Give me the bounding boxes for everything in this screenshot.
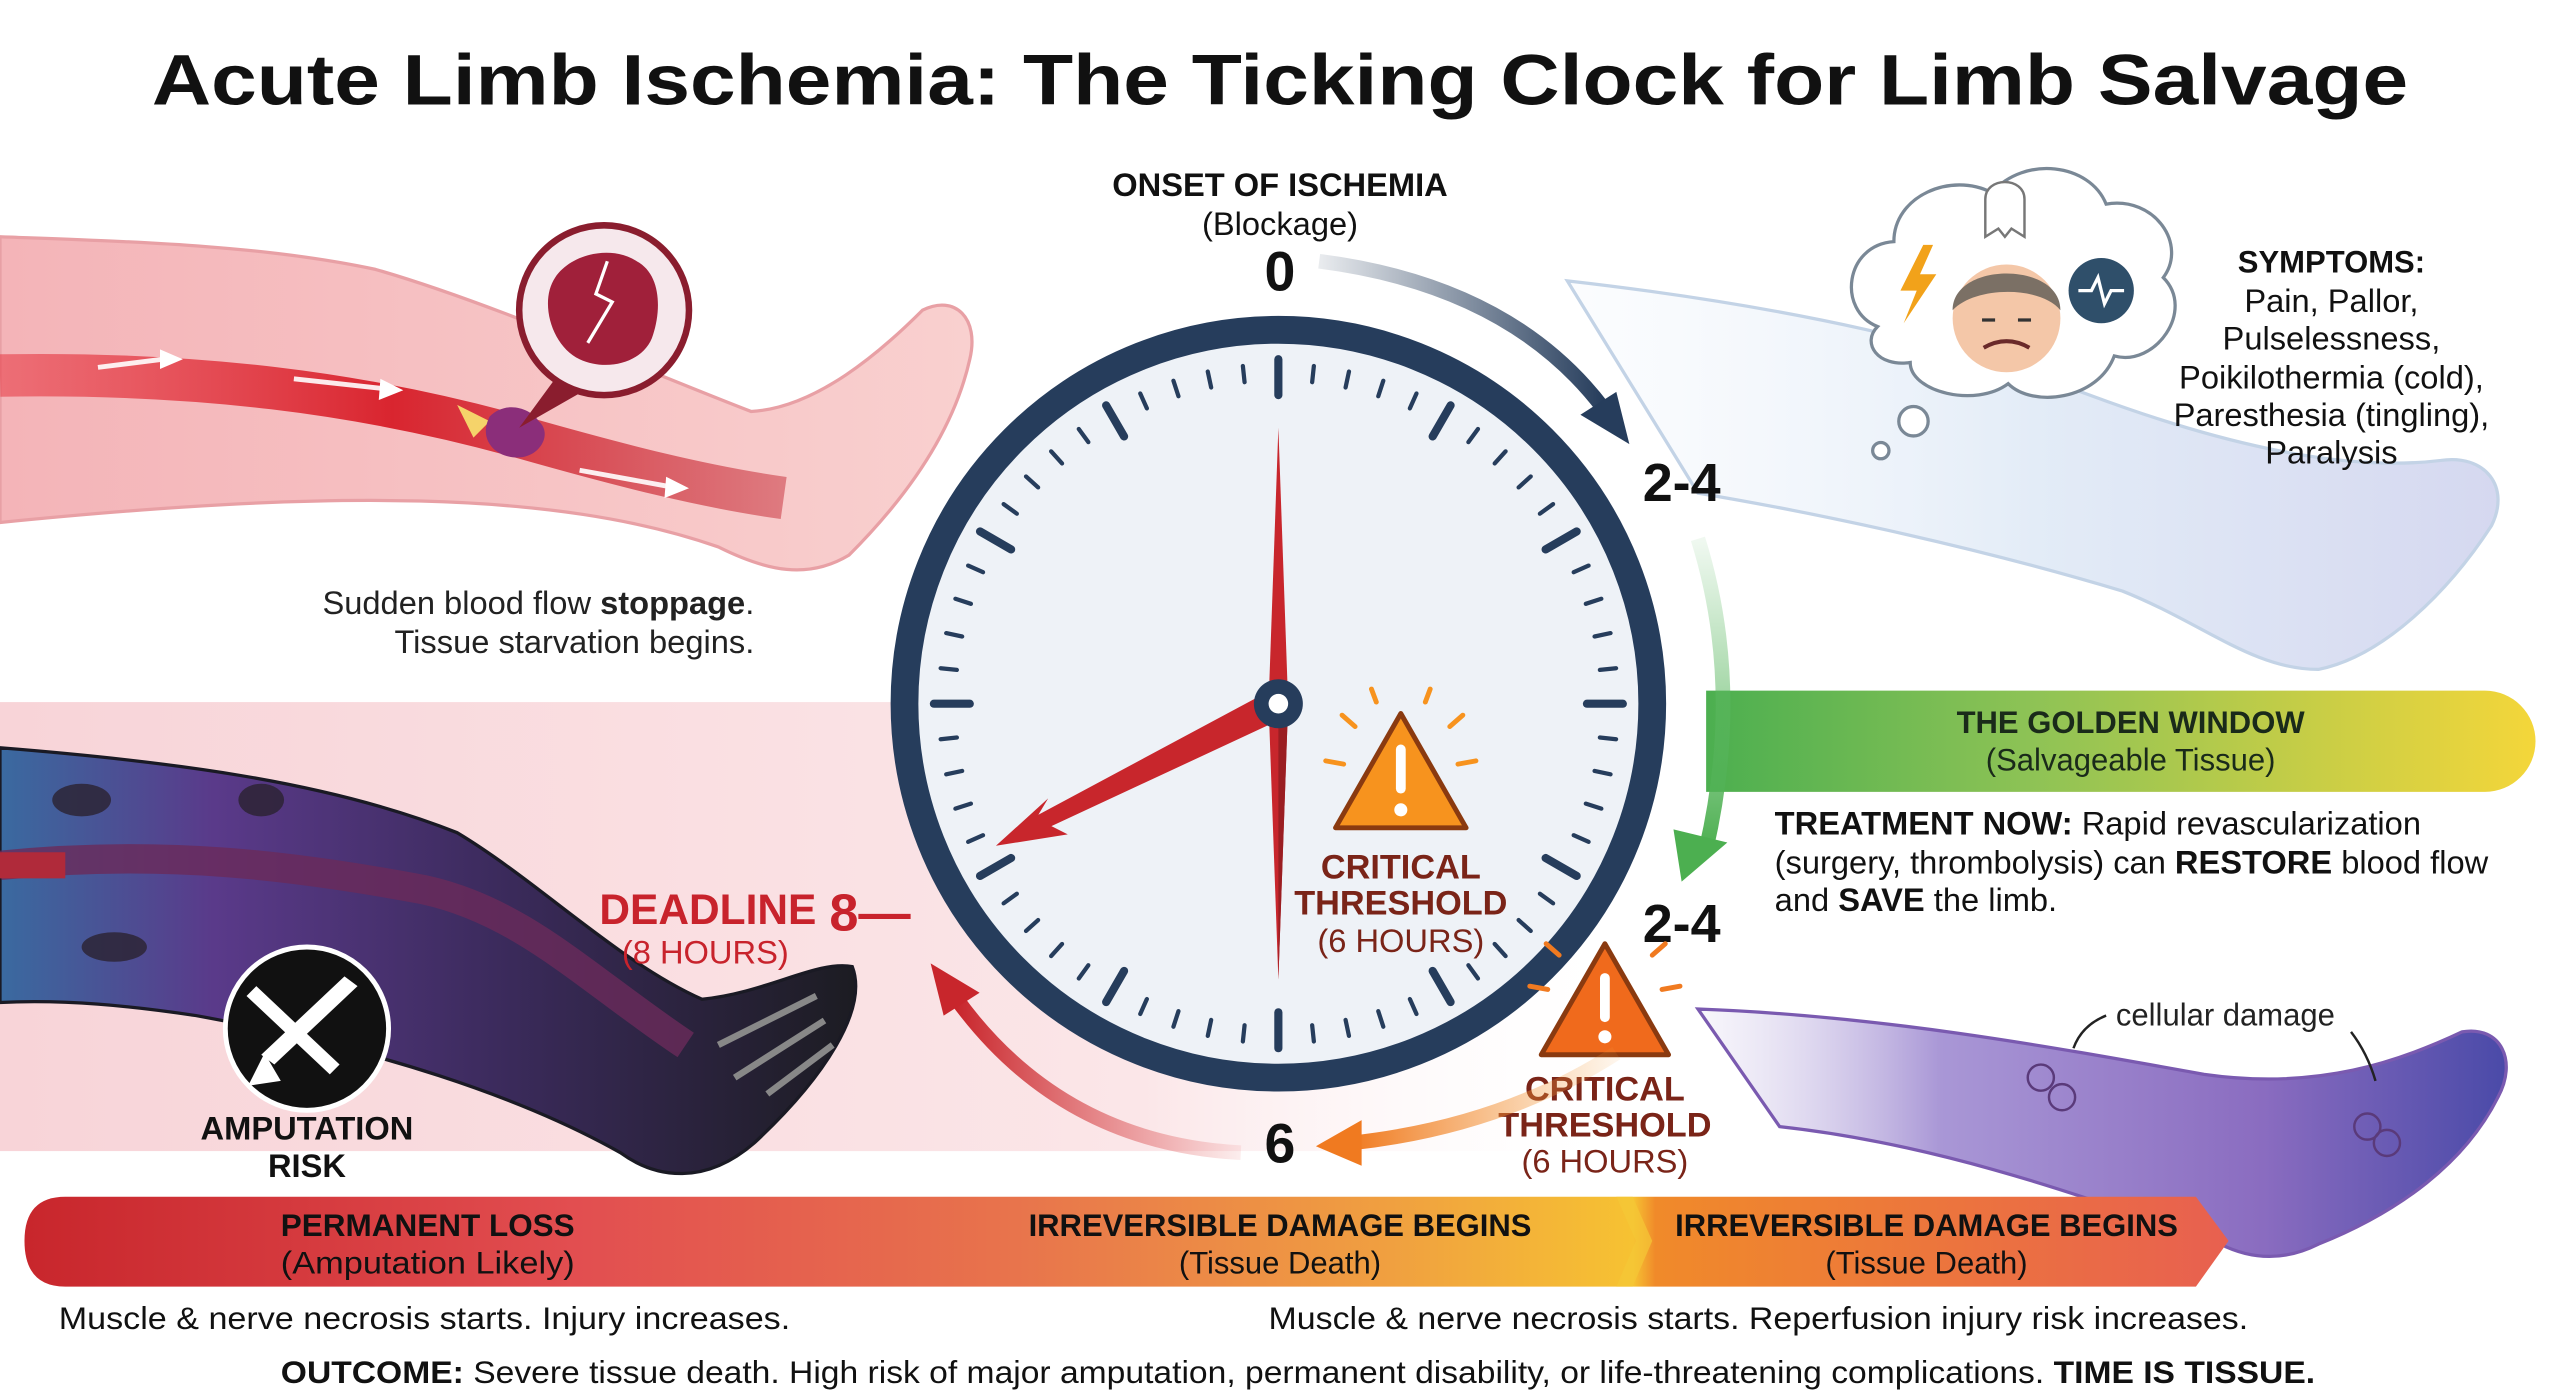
label: critical threshold in clock: THRESHOLD (1294, 884, 1507, 922)
background: pink danger band (0, 702, 1633, 1151)
label: deadline 8 hours: 8— (829, 885, 911, 943)
text: necrosis notes: Muscle & nerve necrosis starts. Reperfusion injury risk increases. (1269, 1301, 2248, 1336)
illustration: pale leg (symptoms) (1567, 281, 2498, 669)
label: 2-4 upper: 2-4 (1643, 453, 1721, 513)
clock (904, 330, 1652, 1078)
callout: clot magnified (519, 225, 689, 428)
timeline bar: (Tissue Death) (1825, 1246, 2028, 1281)
label: onset of ischemia: 0 (1265, 241, 1295, 303)
text: treatment now (1775, 804, 2489, 918)
label: critical threshold in clock (1294, 848, 1507, 959)
label: critical threshold in clock: (6 HOURS) (1317, 922, 1484, 959)
text: treatment now: and SAVE the limb. (1775, 881, 2057, 918)
text: treatment now: (surgery, thrombolysis) can RESTORE blood flow (1775, 844, 2489, 881)
text: sudden blood flow stoppage: Sudden blood flow stoppage. (322, 584, 754, 621)
arrow: 0 to 2-4 (1319, 261, 1629, 444)
arrow: orange to 6 (1316, 1053, 1616, 1166)
text: symptoms list: Paresthesia (tingling), (2174, 396, 2489, 433)
label: amputation risk: AMPUTATION (201, 1110, 413, 1147)
text: sudden blood flow stoppage (322, 584, 754, 660)
illustration: healthy leg with blockage (0, 225, 972, 570)
banner: golden window (1706, 691, 2536, 792)
arrow: green golden window (1673, 539, 1727, 882)
illustration: necrotic leg (0, 748, 856, 1174)
text: necrosis notes: Muscle & nerve necrosis starts. Injury increases. (59, 1301, 790, 1336)
banner: golden window: THE GOLDEN WINDOW (1957, 705, 2305, 740)
timeline bar: IRREVERSIBLE DAMAGE BEGINS (1675, 1208, 2178, 1243)
label: onset of ischemia (1112, 166, 1448, 303)
label: cellular damage (2073, 997, 2376, 1081)
banner: golden window: (Salvageable Tissue) (1986, 743, 2275, 778)
label: deadline 8 hours: (8 HOURS) (622, 933, 789, 970)
label: critical threshold lower: THRESHOLD (1498, 1106, 1712, 1144)
text: symptoms list: Pulselessness, (2223, 319, 2440, 356)
timeline bar: (Tissue Death) (1179, 1246, 1381, 1281)
icon: amputation saw (225, 947, 389, 1110)
label: critical threshold lower: CRITICAL (1525, 1070, 1685, 1108)
clock hands (996, 428, 1303, 980)
label: critical threshold lower: (6 HOURS) (1521, 1142, 1688, 1179)
label: onset of ischemia: ONSET OF ISCHEMIA (1112, 166, 1448, 203)
title: Acute Limb Ischemia: The Ticking Clock for Limb Salvage (152, 40, 2408, 120)
arrow: red to deadline (931, 963, 1241, 1153)
text: sudden blood flow stoppage: Tissue starvation begins. (394, 623, 754, 660)
timeline bar (24, 1197, 2229, 1287)
timeline bar: (Amputation Likely) (281, 1246, 575, 1281)
label: critical threshold lower (1498, 1070, 1712, 1179)
text: outcome: OUTCOME: Severe tissue death. High risk of major amputation, permanent disability, or life-threatening complications. TIME IS TISSUE. (281, 1355, 2315, 1390)
label: amputation risk (201, 1110, 413, 1184)
label: deadline 8 hours: DEADLINE (599, 886, 816, 933)
timeline bar: PERMANENT LOSS (281, 1208, 575, 1243)
text: treatment now: TREATMENT NOW: Rapid revascularization (1775, 804, 2421, 841)
label: amputation risk: RISK (268, 1147, 346, 1184)
text: symptoms list: Poikilothermia (cold), (2179, 359, 2484, 396)
text: symptoms list (2174, 245, 2489, 471)
label: cellular damage: cellular damage (2116, 997, 2335, 1032)
timeline bar: IRREVERSIBLE DAMAGE BEGINS (1029, 1208, 1531, 1243)
label: onset of ischemia: (Blockage) (1202, 205, 1358, 242)
label: critical threshold in clock: CRITICAL (1321, 848, 1481, 886)
text: symptoms list: Pain, Pallor, (2244, 282, 2419, 319)
text: symptoms list: Paralysis (2265, 434, 2398, 471)
icon: warning lower (1530, 944, 1680, 1055)
icon: warning inside clock (1326, 689, 1476, 828)
icon: thought bubble with symptoms (1851, 169, 2175, 459)
text: necrosis notes (59, 1301, 2248, 1336)
label: deadline 8 hours (599, 885, 911, 970)
label: 6: 6 (1265, 1113, 1295, 1175)
illustration: purple damaged leg (1698, 1009, 2506, 1256)
label: 2-4 lower: 2-4 (1643, 894, 1721, 954)
text: symptoms list: SYMPTOMS: (2238, 245, 2425, 280)
